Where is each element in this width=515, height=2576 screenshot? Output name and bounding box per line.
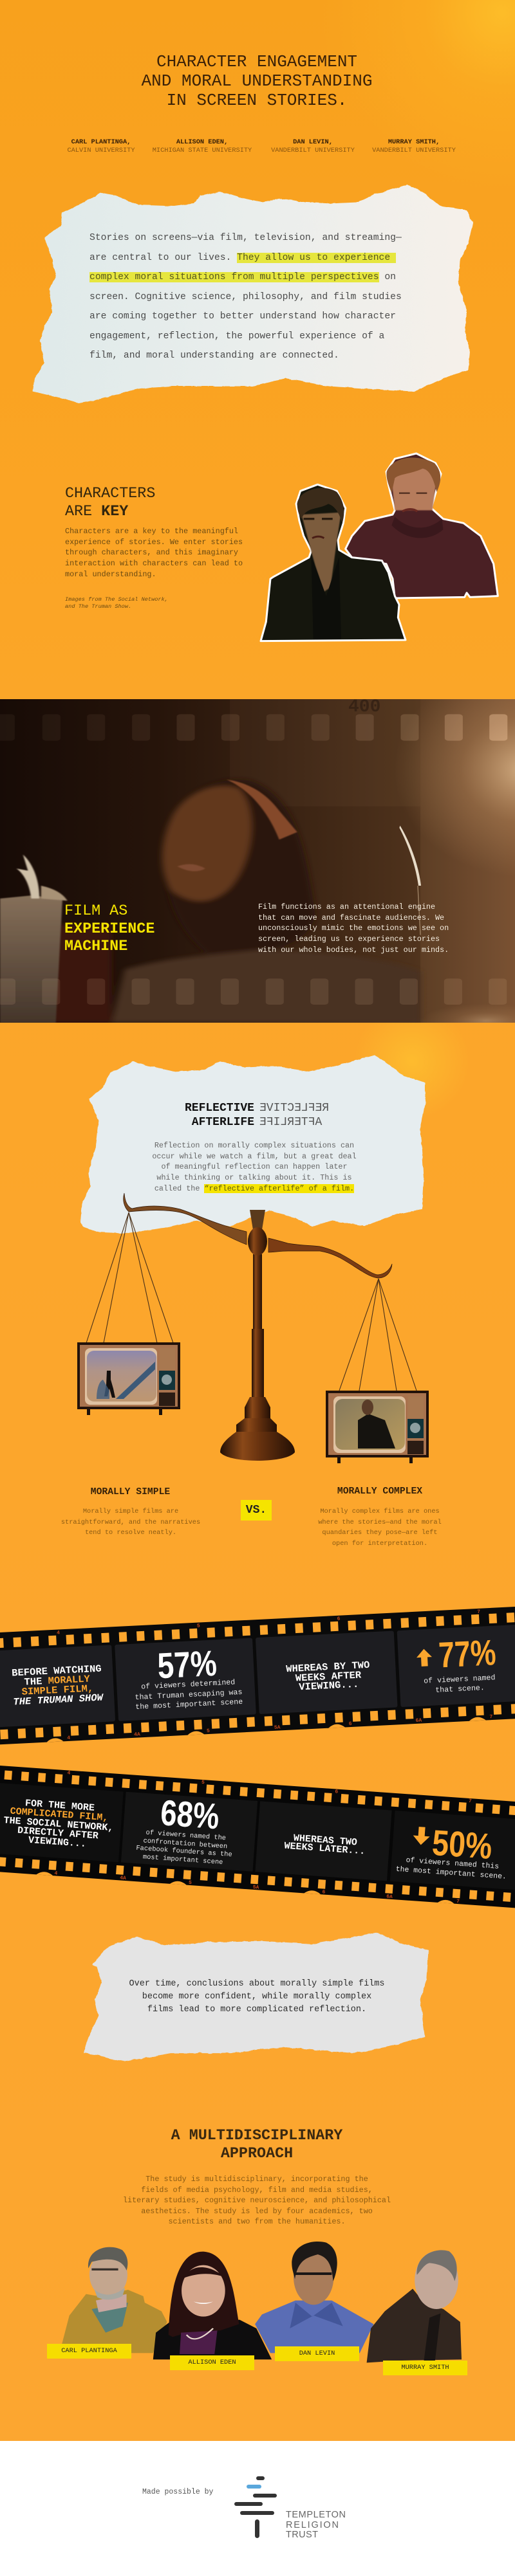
portrait: Murray Smith: [367, 2250, 462, 2362]
sprocket holes: top row: [0, 714, 507, 741]
author: Carl Plantinga: CARL PLANTINGA, CALVIN UNIVERSITY: [67, 138, 135, 154]
vs badge: VS.: [246, 1504, 267, 1517]
stat: 68 percent: of viewers named the: [145, 1829, 226, 1842]
heading: REFLECTIVE AFTERLIFE: [185, 1102, 254, 1128]
strings: left pan: [86, 1212, 173, 1343]
section: conclusion and multidisciplinary approach: [47, 1932, 467, 2375]
heading: FILM AS EXPERIENCE MACHINE: [64, 903, 154, 955]
section: hero: [32, 52, 474, 403]
film strip: The Social Network: 6A: [386, 1894, 393, 1900]
film strip: The Social Network: [0, 1764, 515, 1910]
stat: 68 percent: most important scene: [142, 1853, 223, 1867]
mirrored heading: REFLECTIVE AFTERLIFE: [259, 1102, 329, 1128]
section: film as experience machine: [0, 699, 515, 1023]
television: morally complex film: [326, 1391, 429, 1463]
stat: 50 percent with down arrow: of viewers named this: [406, 1856, 500, 1871]
heading: CHARACTERS ARE KEY: [65, 486, 155, 520]
name tag: Carl Plantinga: [47, 2344, 131, 2359]
authors: [67, 138, 456, 154]
film strip: The Social Network: 6: [322, 1889, 326, 1895]
logo: Templeton Religion Trust: [234, 2476, 346, 2540]
frame text: whereas two weeks later: [284, 1832, 366, 1857]
stat: 68 percent: [135, 1791, 236, 1867]
stat: 57 percent: the most important scene: [135, 1698, 243, 1712]
stat: 50 percent with down arrow: [395, 1820, 510, 1881]
frame text: for the more complicated film: VIEWING...: [28, 1835, 86, 1850]
description: Morally complex films are ones where the stories—and the moral quandaries they pose—are left open for interpretation.: [318, 1508, 442, 1548]
frame text: for the more complicated film: [2, 1796, 115, 1852]
author: Murray Smith: MURRAY SMITH, VANDERBILT UNIVERSITY: [372, 138, 456, 154]
body text: The study is multidisciplinary, incorporating the fields of media psychology, film and media studies, literary studies, cognitive neuroscience, and philosophical aesthetics. The study is led by four academics, two scientists and two from the humanities.: [123, 2175, 391, 2226]
film strip: The Truman Show: 5: [207, 1728, 210, 1734]
frame text: for the more complicated film: THE SOCIAL NETWORK,: [3, 1815, 114, 1834]
frame text: before watching: THE MORALLY: [24, 1673, 91, 1688]
frame text: whereas by two weeks: WEEKS AFTER: [295, 1669, 362, 1685]
film strip: The Social Network: 5: [189, 1880, 192, 1886]
stat: 68 percent: confrontation between: [143, 1837, 228, 1850]
section: film strips with findings: [0, 1607, 515, 1908]
torn paper panel: [84, 1932, 429, 2061]
stat: 68 percent: 68%: [159, 1792, 221, 1836]
film strip: The Social Network: 5: [201, 1780, 205, 1786]
frame text: for the more complicated film: FOR THE MORE: [24, 1798, 95, 1814]
scale stand: [220, 1210, 295, 1461]
name tag: Murray Smith: [383, 2361, 467, 2375]
film strip: The Truman Show: 7: [489, 1714, 493, 1720]
author: Allison Eden: ALLISON EDEN, MICHIGAN STATE UNIVERSITY: [153, 138, 252, 154]
name tag: Dan Levin: [275, 2346, 359, 2361]
researcher portraits: [62, 2242, 462, 2363]
stat: 77 percent with up arrow: [415, 1632, 498, 1695]
film strip: The Social Network: 7: [456, 1899, 460, 1905]
frame text: whereas by two weeks: WHEREAS BY TWO: [286, 1659, 370, 1675]
stat: 77 percent with up arrow: of viewers named: [424, 1674, 496, 1686]
film strip: The Social Network: 5A: [252, 1885, 259, 1891]
logo: Templeton Religion Trust: TRUST: [286, 2530, 318, 2540]
film strip: The Truman Show: 5A: [274, 1724, 281, 1731]
conclusion text: Over time, conclusions about morally simple films become more confident, while morally complex films lead to more complicated reflection.: [129, 1979, 384, 2014]
column: morally simple: [61, 1487, 200, 1537]
frame text: before watching: BEFORE WATCHING: [12, 1663, 102, 1679]
stat: 68 percent: Facebook founders as the: [136, 1845, 232, 1859]
film strip: The Social Network: 4A: [120, 1875, 126, 1881]
background still: woman watching a film through a filmstrip: [0, 699, 515, 1023]
portrait: Carl Plantinga: [60, 2247, 167, 2353]
author: Dan Levin: DAN LEVIN, VANDERBILT UNIVERSITY: [271, 138, 355, 154]
film strip: The Truman Show: 4: [67, 1735, 71, 1741]
torn paper panel: [32, 185, 474, 403]
film strip: The Social Network: 7: [469, 1798, 472, 1804]
film strip: The Truman Show: 7: [477, 1609, 481, 1615]
section: characters are key: [65, 453, 499, 642]
film strip: The Truman Show: 6: [337, 1616, 341, 1622]
portrait: Allison Eden: [153, 2252, 272, 2359]
image credit: Images from The Social Network, and The Truman Show.: [65, 596, 168, 610]
name tag: Allison Eden: [170, 2355, 254, 2370]
frame text: whereas two weeks later: WHEREAS TWO: [293, 1833, 357, 1848]
section: reflective afterlife and scale: [61, 1055, 442, 1548]
stat: 77 percent with up arrow: that scene.: [435, 1684, 485, 1695]
stat: 50 percent with down arrow: 50%: [431, 1822, 493, 1867]
film strip: The Social Network: 4: [67, 1770, 71, 1777]
frame text: before watching: [12, 1663, 104, 1708]
frame text: for the more complicated film: COMPLICATED FILM,: [10, 1806, 109, 1823]
frame text: for the more complicated film: DIRECTLY AFTER: [17, 1825, 98, 1841]
body text: Characters are a key to the meaningful experience of stories. We enter stories through characters, and this imaginary interaction with characters can lead to moral understanding.: [65, 527, 243, 579]
vs badge: [241, 1500, 272, 1521]
name tag: Murray Smith: MURRAY SMITH: [401, 2364, 449, 2371]
figure: Truman in sweater: [346, 453, 498, 598]
name tag: Carl Plantinga: CARL PLANTINGA: [61, 2347, 117, 2355]
film strip: The Truman Show: 6A: [415, 1717, 422, 1724]
column: morally complex: [318, 1486, 442, 1548]
stat: 57 percent: of viewers determined: [141, 1678, 236, 1692]
film strip: The Truman Show: 4A: [134, 1731, 140, 1738]
scale beam: [124, 1193, 392, 1278]
sprocket holes: bottom row: [0, 978, 507, 1005]
body text: Reflection on morally complex situations can occur while we watch a film, but a great deal of meaningful reflection can happen later while thinking or talking about it. This is called the “reflective afterlife” of a film.: [152, 1141, 357, 1193]
section: footer: [0, 2441, 515, 2576]
film strip: The Truman Show: [0, 1606, 515, 1745]
label: MORALLY SIMPLE: [91, 1487, 170, 1497]
film strip: The Truman Show: 5: [197, 1623, 200, 1629]
logo: Templeton Religion Trust: TEMPLETON: [286, 2510, 346, 2520]
television: morally simple film: [77, 1342, 180, 1415]
stat: 50 percent with down arrow: the most important scene.: [395, 1865, 507, 1881]
name tag: Allison Eden: ALLISON EDEN: [188, 2359, 236, 2366]
frame text: whereas by two weeks: VIEWING...: [299, 1679, 359, 1693]
torn paper panel: [80, 1055, 426, 1234]
figure: Mark Zuckerberg in black jacket: [261, 484, 406, 641]
film strip: The Truman Show: 4: [57, 1630, 60, 1636]
credit line: Made possible by: [142, 2488, 213, 2496]
name tag: Dan Levin: DAN LEVIN: [299, 2350, 335, 2357]
film edge number: 400: [348, 697, 380, 717]
frame text: before watching: THE TRUMAN SHOW: [13, 1692, 104, 1708]
frame text: whereas by two weeks: [286, 1659, 371, 1694]
heading: A MULTIDISCIPLINARY APPROACH: [171, 2128, 342, 2162]
portrait: Dan Levin: [255, 2242, 373, 2353]
cutouts of two film characters: [260, 453, 499, 642]
stat: 77 percent with up arrow: 77%: [438, 1632, 497, 1676]
label: MORALLY COMPLEX: [337, 1486, 422, 1497]
film strip: The Truman Show: 6: [349, 1721, 352, 1727]
film strip: The Social Network: 4: [54, 1870, 58, 1877]
balance scale with two televisions: [77, 1192, 429, 1463]
film strip: The Social Network: 6: [335, 1789, 339, 1795]
strings: right pan: [339, 1279, 417, 1391]
title: CHARACTER ENGAGEMENT AND MORAL UNDERSTANDING IN SCREEN STORIES.: [142, 52, 372, 110]
description: Morally simple films are straightforward, and the narratives tend to resolve neatly.: [61, 1508, 200, 1537]
stat: 57 percent: [133, 1641, 243, 1712]
logo: Templeton Religion Trust: RELIGION: [286, 2520, 339, 2530]
stat: 57 percent: 57%: [156, 1643, 218, 1686]
frame text: before watching: SIMPLE FILM,: [21, 1683, 94, 1698]
intro text: Stories on screens—via film, television, and streaming— are central to our lives. They allow us to experience complex moral situations from multiple perspectives on screen. Cognitive science, philosophy, and film studies are coming together to better understand how character engagement, reflection, the powerful experience of a film, and moral understanding are connected.: [89, 233, 402, 361]
body text: Film functions as an attentional engine that can move and fascinate audiences. We unconsciously mimic the emotions we see on screen, leading us to experience stories with our whole bodies, not just our minds.: [258, 902, 449, 955]
stat: 57 percent: that Truman escaping was: [135, 1688, 243, 1702]
frame text: whereas two weeks later: WEEKS LATER...: [284, 1841, 366, 1857]
